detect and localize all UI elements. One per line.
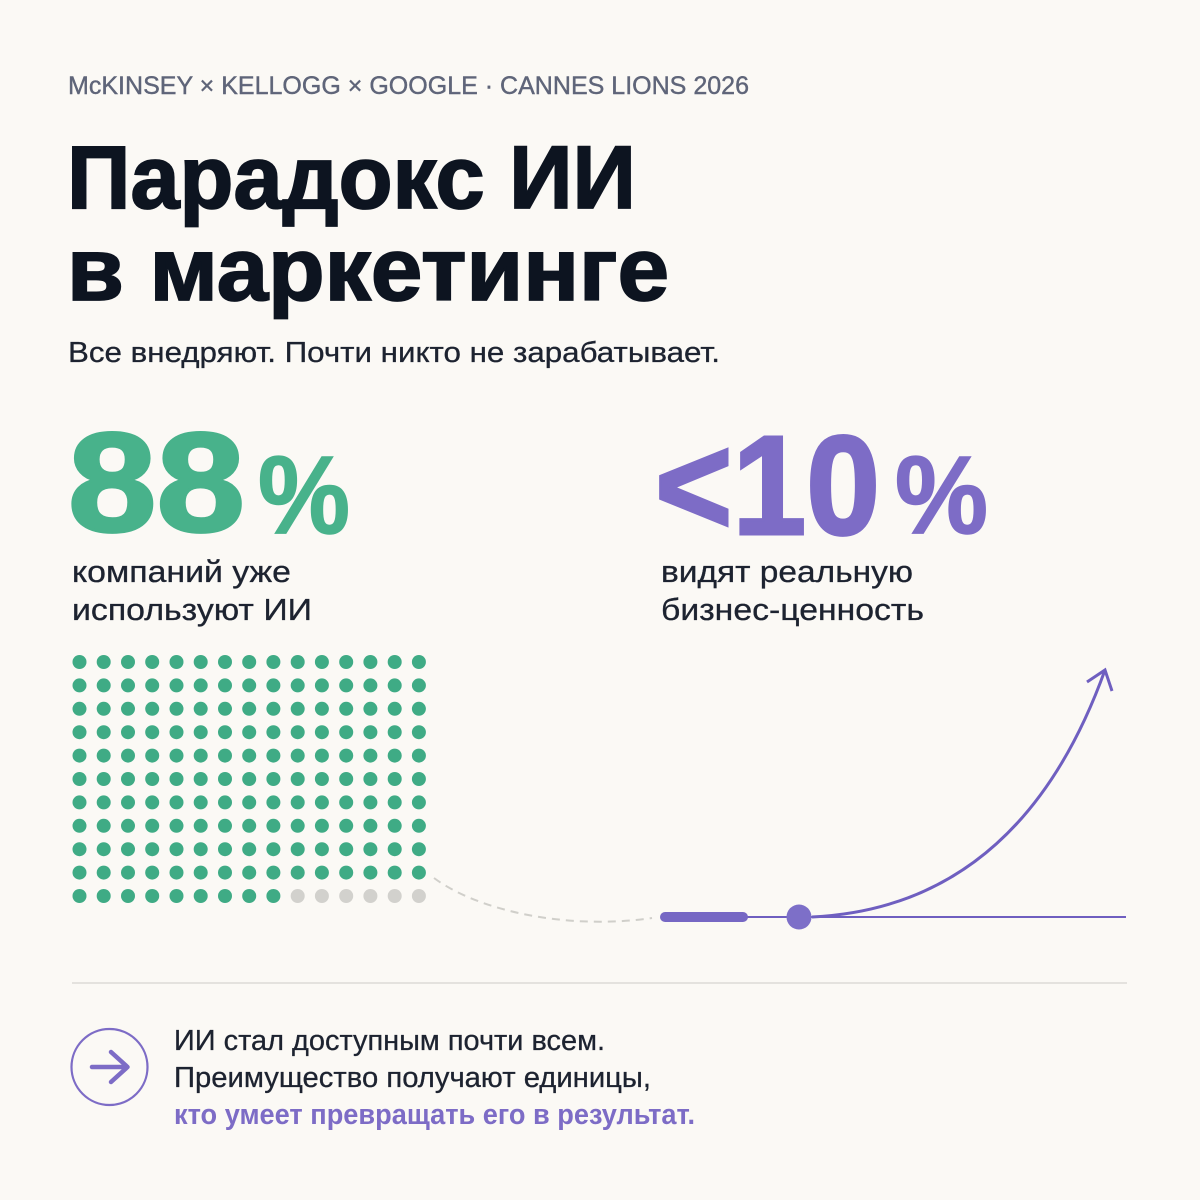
label: 88%: используют ИИ	[72, 592, 312, 627]
label: <10%: бизнес-ценность	[661, 592, 924, 627]
eyebrow: sources: McKINSEY × KELLOGG × GOOGLE · CANNES LIONS 2026	[68, 72, 749, 100]
stat: 88%: %	[258, 434, 350, 557]
dashed connector	[434, 878, 652, 922]
conclusion text: кто умеет превращать его в результат.	[174, 1099, 695, 1131]
growth chart: baseline and curve with arrow	[660, 670, 1126, 930]
title	[67, 127, 669, 319]
title: Парадокс ИИ	[67, 127, 636, 227]
conclusion text: ИИ стал доступным почти всем.	[174, 1025, 605, 1057]
label: <10%: видят реальную	[661, 554, 913, 589]
divider	[72, 982, 1127, 984]
conclusion text: Преимущество получают единицы,	[174, 1062, 651, 1094]
dot grid: 88 percent adoption	[72, 655, 426, 903]
label: <10%	[661, 554, 924, 627]
title: в маркетинге	[67, 219, 669, 319]
label: 88%	[72, 554, 312, 627]
subtitle: Все внедряют. Почти никто не зарабатывает.	[68, 337, 720, 369]
stat: <10%: %	[895, 434, 988, 557]
conclusion text	[174, 1025, 695, 1131]
stat: 88%	[68, 403, 350, 561]
stat: <10%: <10	[655, 406, 880, 564]
stat: 88%: 88	[68, 403, 245, 561]
label: 88%: компаний уже	[72, 554, 291, 589]
icon: arrow in circle	[72, 1029, 148, 1105]
